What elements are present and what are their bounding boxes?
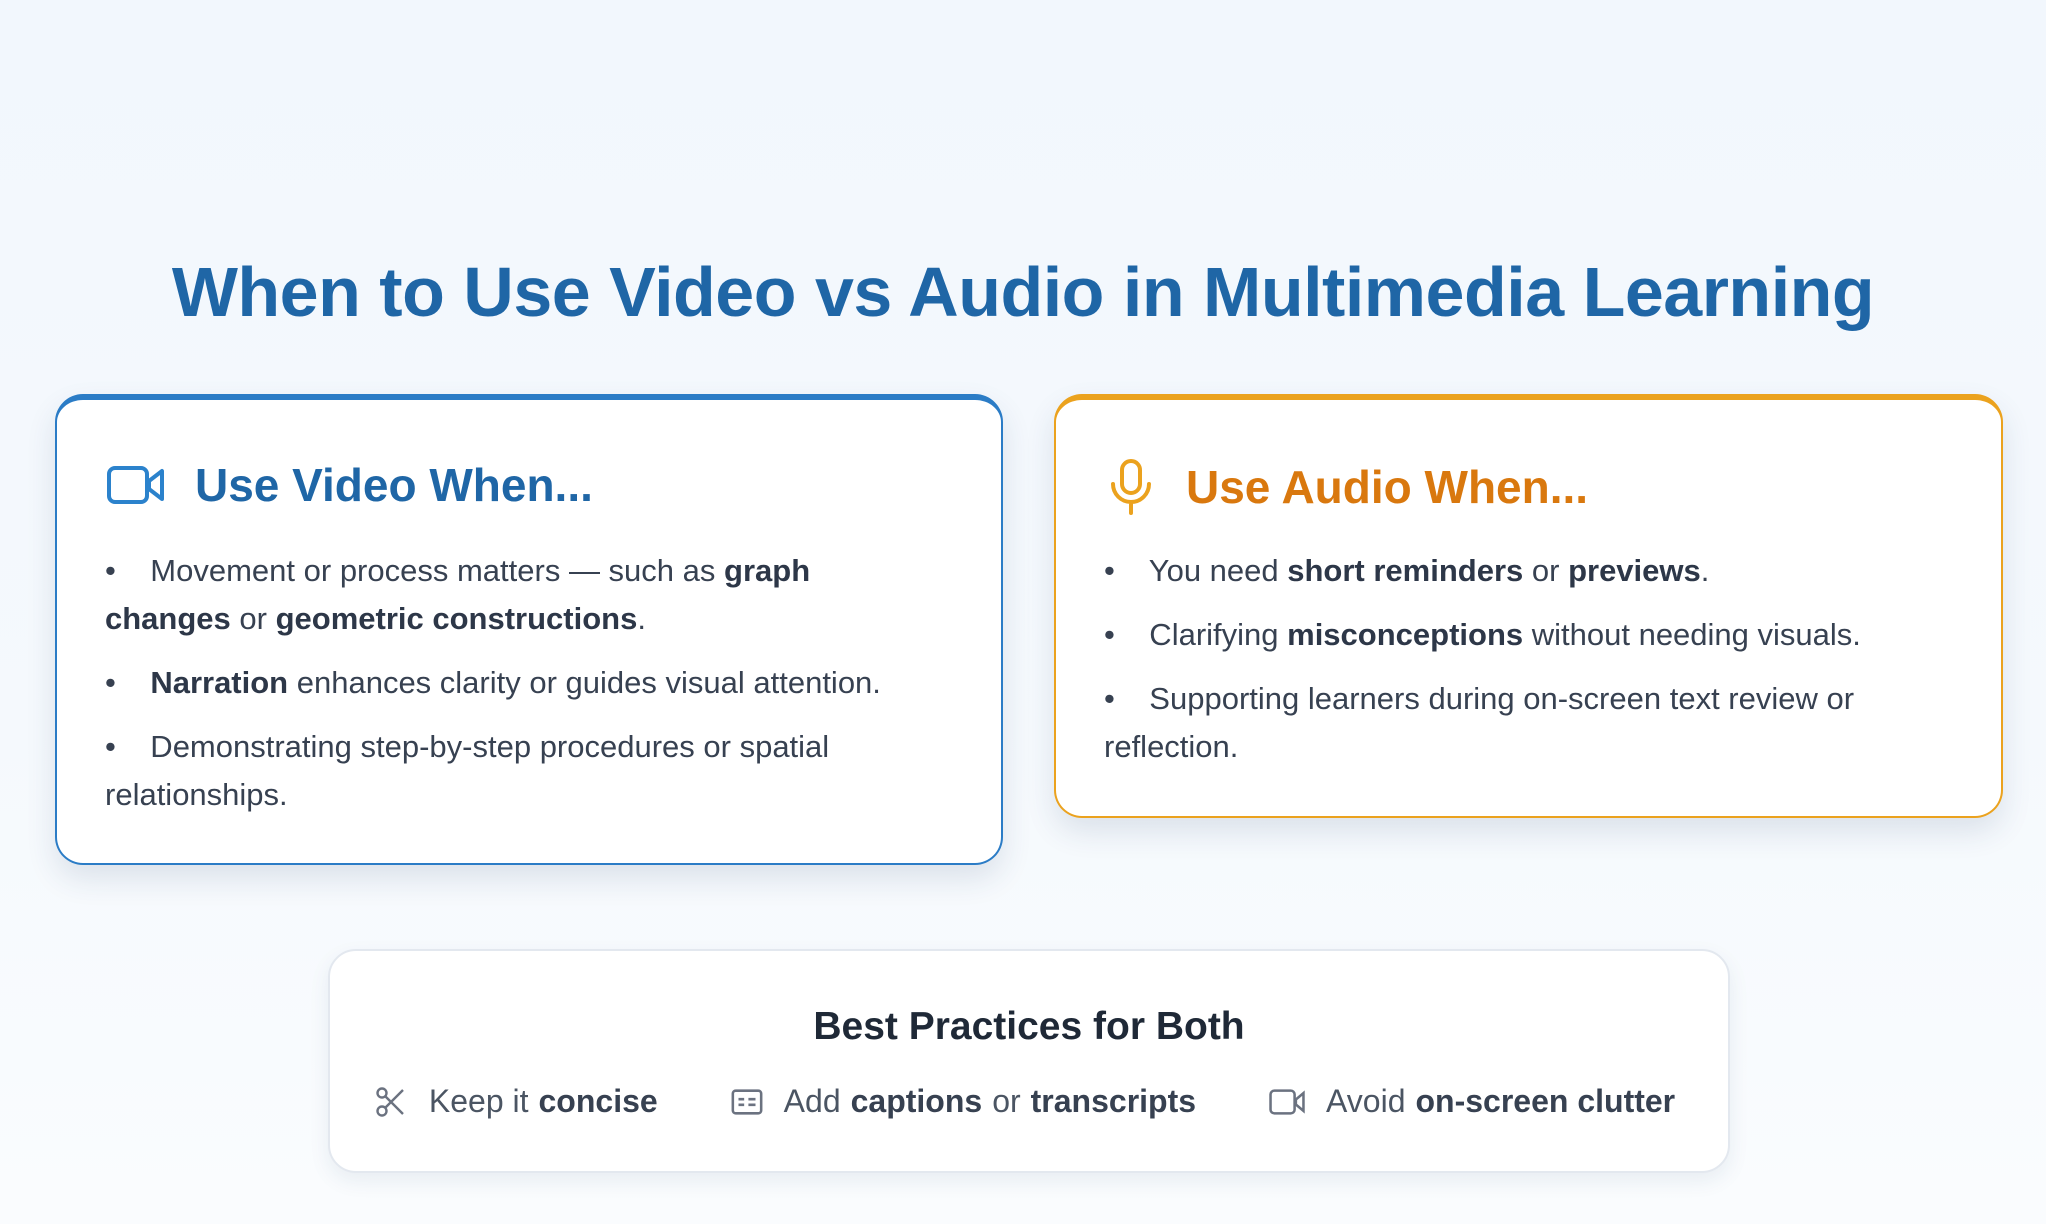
item: captions: Add or xyxy=(784,1083,1021,1119)
heading: video: Use Video When... xyxy=(195,459,593,511)
item: clutter: on-screen clutter xyxy=(1416,1083,1675,1119)
audio bullets: • You need short reminders or previews. xyxy=(1104,553,1709,588)
video bullets: • Movement or process matters — such as graph changes or geometric constructions. xyxy=(105,553,810,636)
item: clutter: Avoid xyxy=(1326,1083,1406,1119)
item: concise xyxy=(376,1083,658,1119)
audio bullets xyxy=(1104,553,1861,764)
panel: audio xyxy=(1054,394,2003,818)
item: concise: Keep it xyxy=(429,1083,528,1119)
panel: video xyxy=(55,394,1003,865)
video bullets xyxy=(105,553,881,812)
item: concise: concise xyxy=(538,1083,658,1119)
item: captions: captions xyxy=(851,1083,982,1119)
video bullets: • Demonstrating step-by-step procedures or spatial relationships. xyxy=(105,729,829,812)
item: captions xyxy=(732,1083,1196,1119)
item: captions: transcripts xyxy=(1031,1083,1196,1119)
title: When to Use Video vs Audio in Multimedia Learning xyxy=(172,253,1874,331)
item: clutter xyxy=(1269,1083,1675,1119)
video bullets: • Narration enhances clarity or guides visual attention. xyxy=(105,665,881,700)
audio bullets: • Clarifying misconceptions without needing visuals. xyxy=(1104,617,1861,652)
best practices items xyxy=(376,1083,1675,1119)
panel: best practices xyxy=(328,949,1730,1173)
heading: audio: Use Audio When... xyxy=(1186,461,1588,513)
best practices heading: Best Practices for Both xyxy=(813,1005,1245,1048)
audio bullets: • Supporting learners during on-screen text review or reflection. xyxy=(1104,681,1854,764)
